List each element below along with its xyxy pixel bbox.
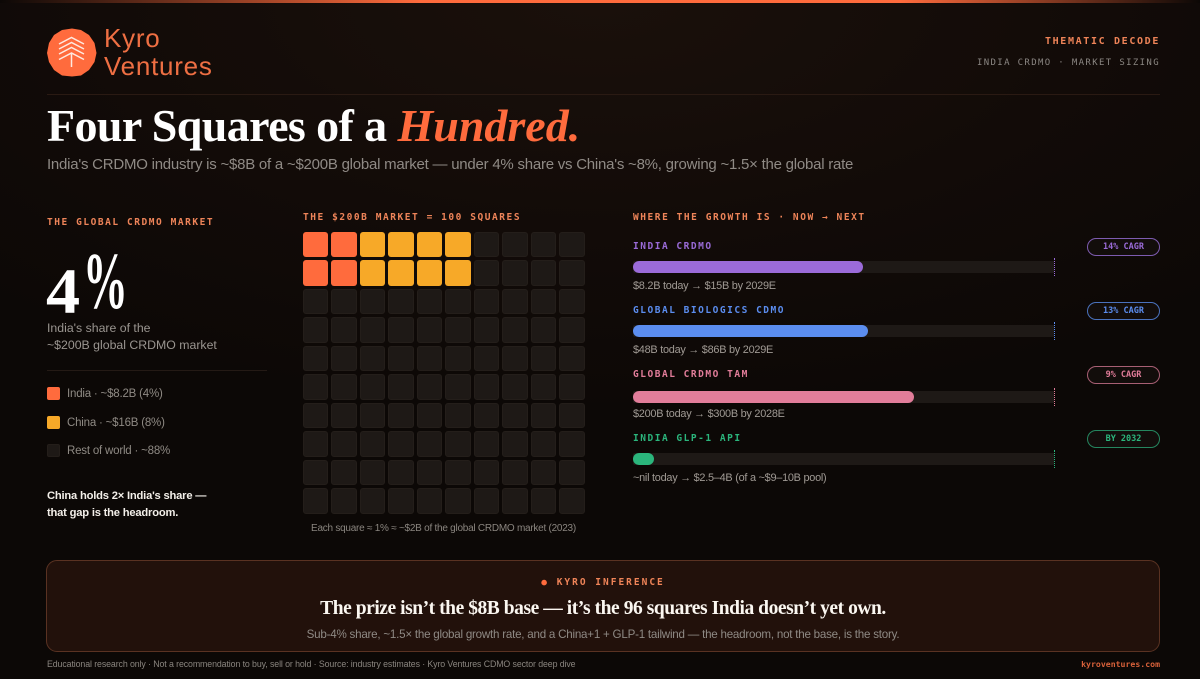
row: Global CRDMO TAM: [633, 366, 1160, 420]
bar track: [633, 261, 1054, 273]
row caption: $200B today → $300B by 2028E: [633, 408, 785, 420]
panel: Kyro inference: [46, 560, 1160, 652]
row: India CRDMO: [633, 238, 1160, 292]
pill: [1087, 238, 1160, 256]
waffle chart: [303, 232, 585, 514]
footer url: kyroventures.com: [1081, 659, 1160, 669]
legend: India: [47, 387, 60, 400]
inference headline: The prize isn’t the $8B base — it’s the 96 squares India doesn’t yet own.: [320, 598, 886, 619]
row label: GLOBAL CRDMO TAM: [633, 369, 749, 380]
row: India GLP-1 API: [633, 430, 1160, 484]
pill: [1087, 430, 1160, 448]
bar fill: [633, 261, 863, 273]
grid heading: THE $200B MARKET = 100 SQUARES: [303, 212, 521, 223]
row label: GLOBAL BIOLOGICS CDMO: [633, 305, 785, 316]
divider: [47, 94, 1160, 95]
target tick: [1054, 388, 1055, 406]
row: Global Biologics CDMO: [633, 302, 1160, 356]
target tick: [1054, 450, 1055, 468]
pill: [1087, 366, 1160, 384]
divider: [47, 370, 267, 371]
title: Four Squares of a Hundred.: [47, 100, 580, 151]
big number: 4: [46, 256, 80, 328]
header tag: [977, 36, 1160, 68]
pill: BY 2032: [1106, 434, 1141, 444]
pill: 9% CAGR: [1106, 370, 1141, 380]
panel: left stat: [46, 217, 267, 371]
tag subtitle: INDIA CRDMO · MARKET SIZING: [977, 58, 1160, 68]
big number: %: [83, 238, 128, 326]
tag title: THEMATIC DECODE: [1045, 36, 1160, 47]
target tick: [1054, 322, 1055, 340]
legend: [47, 387, 170, 457]
legend China text: China · ~$16B (8%): [67, 417, 165, 429]
row label: INDIA GLP-1 API: [633, 433, 742, 444]
inference label: ● KYRO INFERENCE: [541, 577, 665, 588]
big number: [46, 238, 128, 328]
callout: headroom: China holds 2× India's share — that gap is the headroom.: [47, 490, 206, 519]
pill: 13% CAGR: [1103, 306, 1144, 316]
top accent bar: [0, 0, 1200, 2]
row caption: $48B today → $86B by 2029E: [633, 344, 773, 356]
bar track: [633, 325, 1054, 337]
wordmark: Kyro Ventures: [104, 23, 213, 81]
footer disclaimer: Educational research only · Not a recommendation to buy, sell or hold · Source: industry estimates · Kyro Ventures CDMO sector deep dive: [47, 659, 575, 669]
row label: INDIA CRDMO: [633, 241, 713, 252]
panel heading: THE GLOBAL CRDMO MARKET: [47, 217, 214, 228]
legend India text: India · ~$8.2B (4%): [67, 388, 163, 400]
bar fill: [633, 453, 654, 465]
grid caption: Each square ≈ 1% ≈ ~$2B of the global CRDMO market (2023): [311, 523, 576, 534]
row caption: ~nil today → $2.5–4B (of a ~$9–10B pool): [633, 472, 826, 484]
legend rest text: Rest of world · ~88%: [67, 445, 170, 457]
stat caption: India's share of the ~$200B global CRDMO market: [47, 321, 217, 352]
legend: rest of world: [47, 444, 60, 457]
row caption: $8.2B today → $15B by 2029E: [633, 280, 776, 292]
growth heading: WHERE THE GROWTH IS · NOW → NEXT: [633, 212, 866, 223]
pill: [1087, 302, 1160, 320]
pill: 14% CAGR: [1103, 242, 1144, 252]
bar fill: [633, 391, 914, 403]
legend: China: [47, 416, 60, 429]
subtitle: India's CRDMO industry is ~$8B of a ~$200B global market — under 4% share vs China's ~8%, growing ~1.5× the global rate: [47, 156, 853, 173]
icon: tree emblem: [47, 28, 96, 76]
target tick: [1054, 258, 1055, 276]
bar fill: [633, 325, 868, 337]
logo: [47, 23, 213, 81]
bar track: [633, 453, 1054, 465]
bar track: [633, 391, 1054, 403]
inference body: Sub-4% share, ~1.5× the global growth rate, and a China+1 + GLP-1 tailwind — the headroom, not the base, is the story.: [307, 628, 899, 641]
